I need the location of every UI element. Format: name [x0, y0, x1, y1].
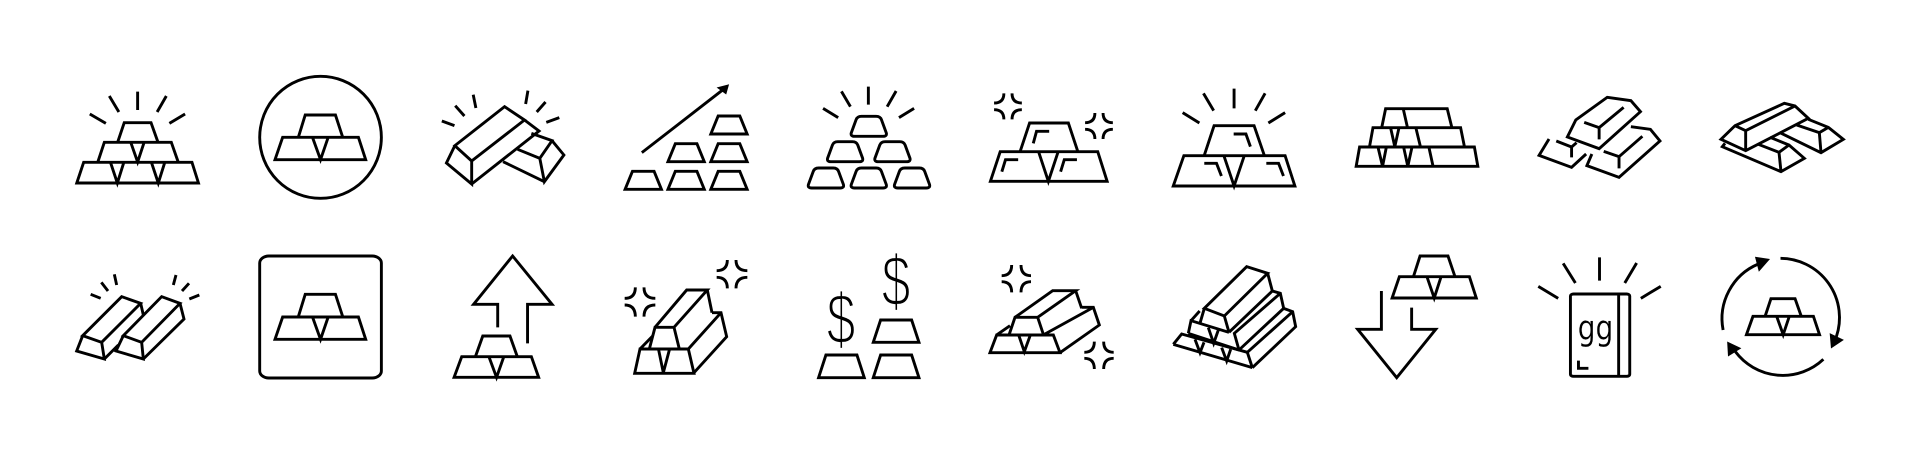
icon: three shining large gold bars [1173, 89, 1295, 186]
icon: gold bars with up arrow [454, 256, 552, 377]
icon: rising stacks of gold bars with arrow [625, 85, 747, 189]
icon: three sparkling gold bars [990, 93, 1113, 181]
icon: three gold bars in a rounded square [260, 256, 381, 378]
icon: gold bars with dollar signs: $ [882, 242, 910, 322]
icon: three isometric gold bars in a pile [1721, 103, 1843, 172]
icon: two shining gold bars side by side [77, 274, 199, 359]
icon: shining pyramid of rounded bars [808, 87, 930, 188]
icon: three angled outlined gold bars [1539, 97, 1660, 177]
icon: three gold bars in a circle [260, 76, 381, 198]
icon: gold bars with down arrow [1358, 256, 1476, 378]
icon: shining pyramid of six gold bars [77, 92, 198, 183]
icon: shining stamped gold bar with gg label: gg [1578, 309, 1613, 349]
icon: wall of stacked gold bars [1356, 109, 1478, 166]
icon: sparkling isometric pile of bars [625, 260, 747, 373]
icon: gold bars with dollar signs [819, 242, 919, 378]
icon: gold bars with dollar signs: $ [827, 280, 855, 360]
icon: two shining angled gold bars [442, 91, 564, 184]
icon: sparkling stack of angled bars [990, 265, 1114, 369]
icon: gold bars with circular arrows [1722, 257, 1843, 375]
icon: large isometric pile of gold bars [1173, 267, 1296, 368]
icon: shining stamped gold bar with gg label [1538, 257, 1661, 376]
